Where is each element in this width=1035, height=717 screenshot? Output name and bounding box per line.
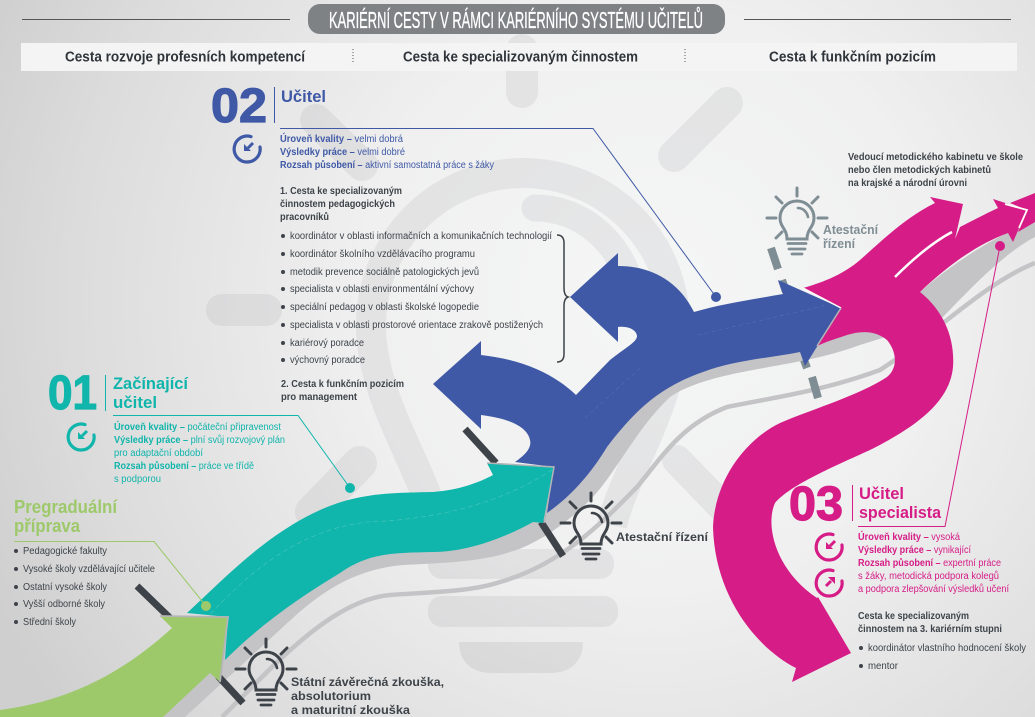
title: KARIÉRNÍ CESTY V RÁMCI KARIÉRNÍHO SYSTÉMU UČITELŮ [329,5,703,33]
panel: pregradual preparation: Ostatní vysoké školy [23,582,107,593]
text block: specialised activities list [280,186,552,403]
panel: 02 teacher [211,80,721,302]
panel: 01 beginning teacher: pro adaptační období [114,448,203,459]
text block: specialised activities list: specialista v oblasti environmentální výchovy [290,284,474,295]
bulb icon: attestation 2 [767,188,827,254]
gate 2 [465,429,563,556]
panel: pregradual preparation: Pedagogické fakulty [23,546,107,557]
label: attestation 2: Atestační [823,223,879,237]
label: attestation 1: Atestační řízení [616,530,709,544]
label: state exam [291,675,444,717]
panel: 03 specialist teacher: a podpora zlepšování výsledků učení [858,583,1009,595]
panel: 01 beginning teacher: učitel [113,393,157,412]
panel: pregradual preparation: Vysoké školy vzdělávající učitele [23,564,155,575]
text block: third-level activities: Cesta ke specializovaným [858,611,969,622]
career paths band: Cesta ke specializovaným činnostem [403,50,638,66]
background light bulb watermark [222,50,735,673]
panel: 02 teacher: 02 [211,80,267,133]
teal arrow: beginning teacher [187,463,554,660]
panel: 01 beginning teacher: Začínající [113,374,189,393]
panel: pregradual preparation: Střední školy [23,617,76,628]
label: state exam: absolutorium [291,689,371,703]
road track [163,222,1035,717]
text block: specialised activities list: 1. Cesta ke specializovaným [280,186,402,197]
text block: specialised activities list: činnostem pedagogických [280,199,395,210]
title [308,4,725,34]
text block: third-level activities [858,611,1026,672]
panel: pregradual preparation [14,497,211,628]
panel: 02 teacher: Úroveň kvality – velmi dobrá [280,132,403,145]
text block: specialised activities list: koordinátor v oblasti informačních a komunikačních technologií [290,231,552,242]
text block: specialised activities list: pro management [281,392,358,403]
text block: third-level activities: koordinátor vlastního hodnocení školy [868,643,1026,654]
label: attestation 2: řízení [823,237,856,251]
panel: 01 beginning teacher: Výsledky práce – plní svůj rozvojový plán [114,434,285,446]
panel: 01 beginning teacher [48,367,355,493]
text block: specialised activities list: metodik prevence sociálně patologických jevů [290,266,479,278]
label: state exam: a maturitní zkouška [291,703,410,717]
text block: specialised activities list: kariérový poradce [290,338,364,349]
text block: specialised activities list: specialista v oblasti prostorové orientace zrakově postižených [290,320,543,331]
icon: quality arrow in [234,136,260,162]
text block: specialised activities list: 2. Cesta k funkčním pozicím [281,379,404,390]
panel: pregradual preparation: příprava [14,516,81,536]
career paths band: Cesta rozvoje profesních kompetencí [65,50,306,66]
right header rule [744,18,1011,20]
pink arrow: specialist paths [713,193,1035,682]
gate 1 [137,586,243,703]
panel: 02 teacher: Učitel [281,87,326,106]
panel: 03 specialist teacher: Úroveň kvality – vysoká [858,530,960,543]
text block: third-level activities: mentor [868,661,899,672]
panel: 03 specialist teacher: Rozsah působení – expertní práce [858,557,1001,569]
gate 3 [771,248,818,398]
icon: quality arrow in [68,424,94,450]
blue arrow: teacher branching paths [433,253,841,513]
bulb icon: state exam [236,639,296,705]
career paths band: Cesta k funkčním pozicím [769,50,936,66]
panel: 01 beginning teacher: 01 [48,367,97,420]
text block: methodical cabinet: na krajské a národní úrovni [848,178,967,189]
label: attestation 2 [823,223,879,251]
career paths band [21,43,1017,71]
text block: third-level activities: činnostem na 3. kariérním stupni [858,624,1002,635]
icon: quality arrow out [816,570,842,596]
thin road line [222,263,1035,717]
text block: specialised activities list: koordinátor školního vzdělávacího programu [290,249,475,260]
green arrow: pregradual preparation [0,616,228,717]
text block: specialised activities list: pracovníků [280,211,329,223]
left header rule [22,18,290,20]
panel: 01 beginning teacher: Úroveň kvality – počáteční připravenost [114,420,281,433]
label: state exam: Státní závěrečná zkouška, [291,675,444,689]
text block: specialised activities list: výchovný poradce [290,355,365,366]
panel: 02 teacher: Rozsah působení – aktivní samostatná práce s žáky [280,159,494,171]
panel: 01 beginning teacher: s podporou [114,474,161,485]
panel: 01 beginning teacher: Rozsah působení – práce ve třídě [114,460,254,472]
panel: 03 specialist teacher: Výsledky práce – vynikající [858,545,971,556]
icon: quality arrow in [816,534,842,560]
panel: pregradual preparation: Vyšší odborné školy [23,599,105,610]
panel: 03 specialist teacher: Učitel [859,484,904,503]
text block: specialised activities list: speciální pedagog v oblasti školské logopedie [290,302,479,313]
text block: methodical cabinet [848,152,1023,189]
panel: 03 specialist teacher: 03 [789,478,843,531]
brace [557,235,568,362]
bulb icon: attestation 1 [561,493,621,559]
panel: 03 specialist teacher: specialista [859,503,942,522]
text block: methodical cabinet: Vedoucí metodického kabinetu ve škole [848,152,1023,163]
text block: methodical cabinet: nebo člen metodických kabinetů [848,164,991,176]
panel: 03 specialist teacher [789,241,1009,596]
panel: 03 specialist teacher: s žáky, metodická podpora kolegů [858,570,999,582]
panel: 02 teacher: Výsledky práce – velmi dobré [280,147,405,158]
panel: pregradual preparation: Pregraduální [14,497,118,517]
